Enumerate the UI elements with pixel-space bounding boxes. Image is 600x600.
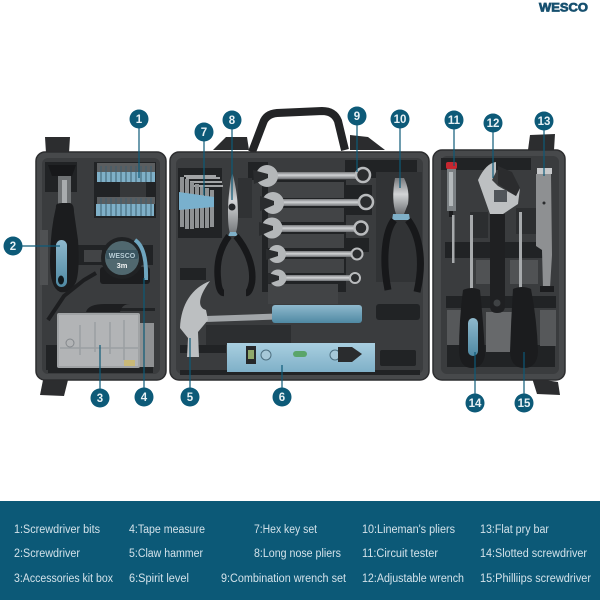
icon: hex key set: [179, 176, 223, 229]
callout 12: [484, 114, 502, 178]
legend column 5: [480, 524, 591, 585]
callout 5: [180, 338, 200, 406]
callout 6: [272, 365, 292, 406]
callout 4: 4: [141, 392, 148, 404]
panel: legend footer: [0, 501, 600, 600]
callout 7: [194, 122, 214, 195]
wrench 3: [259, 218, 368, 238]
callout 14: [466, 352, 484, 412]
panel: left case tray: [36, 152, 166, 380]
callout 13: [534, 112, 554, 176]
icon: slotted screwdriver: [459, 215, 485, 368]
legend column 4: 11:Circuit tester: [362, 548, 438, 560]
callout 14: 14: [469, 398, 482, 410]
callout 3: 3: [97, 393, 103, 405]
callout 9: [348, 106, 366, 172]
legend column 1: 3:Accessories kit box: [14, 573, 113, 585]
legend column 2: 6:Spirit level: [129, 573, 189, 585]
callout 1: 1: [136, 114, 143, 126]
legend column 1: 1:Screwdriver bits: [14, 524, 100, 536]
callout 11: 11: [448, 115, 461, 127]
icon: lineman's pliers: [385, 178, 420, 292]
legend column 1: [14, 524, 113, 585]
legend column 4: [362, 524, 464, 585]
icon: tape measure: [100, 237, 150, 284]
callout 10: [390, 110, 410, 188]
case carry handle: [213, 111, 385, 152]
callout 12: 12: [487, 118, 499, 130]
icon: spirit level: [227, 343, 375, 372]
callout 7: 7: [201, 127, 207, 139]
icon: accessories kit box: [57, 304, 140, 368]
legend column 3: 8:Long nose pliers: [254, 548, 341, 560]
icon: claw hammer: [180, 281, 362, 357]
callout 8: 8: [229, 115, 236, 127]
callout 11: [444, 110, 464, 166]
legend column 4: 12:Adjustable wrench: [362, 573, 464, 585]
callout 15: [514, 352, 534, 412]
icon: screwdriver: [48, 165, 96, 320]
callout 6: 6: [279, 392, 285, 404]
legend column 5: 15:Philliips screwdriver: [480, 573, 591, 585]
callout 2: 2: [10, 241, 16, 253]
legend column 5: 14:Slotted screwdriver: [480, 548, 587, 560]
callout 3: [90, 345, 110, 408]
case latches: [40, 134, 560, 396]
icon: circuit tester: [446, 162, 457, 263]
brand logo: WESCO: [539, 2, 588, 14]
legend column 4: 10:Lineman's pliers: [362, 524, 455, 536]
legend column 3: 7:Hex key set: [254, 524, 318, 536]
wrench 4: [266, 245, 362, 263]
callout 13: 13: [538, 116, 550, 128]
icon: tape measure: 3m: [117, 261, 128, 270]
wrench 1: [253, 165, 370, 187]
legend column 2: 5:Claw hammer: [129, 548, 203, 560]
callout 5: 5: [187, 392, 194, 404]
callout 9: 9: [354, 111, 360, 123]
panel: right case tray: [433, 150, 565, 380]
legend column 3: [221, 524, 347, 585]
callout 2: [4, 236, 60, 256]
callout 4: [134, 278, 154, 406]
callout 1: [130, 110, 148, 178]
panel: centre case tray: [170, 152, 429, 380]
callout 15: 15: [518, 398, 531, 410]
icon: adjustable wrench: [478, 162, 520, 313]
wrench 5: [268, 270, 360, 286]
wrench 2: [260, 192, 373, 214]
icon: phillips screwdriver: [510, 212, 538, 368]
legend column 2: [129, 524, 205, 585]
icon: tape measure: WESCO: [109, 253, 136, 260]
icon: combination wrench set: [253, 165, 373, 286]
legend column 3: 9:Combination wrench set: [221, 573, 347, 585]
callout markers: [4, 106, 554, 412]
icon: long nose pliers: [217, 172, 252, 293]
icon: flat pry bar: [536, 168, 554, 292]
legend column 2: 4:Tape measure: [129, 524, 205, 536]
callout 10: 10: [394, 114, 406, 126]
callout 8: [222, 110, 242, 200]
legend column 5: 13:Flat pry bar: [480, 524, 549, 536]
legend column 1: 2:Screwdriver: [14, 548, 80, 560]
icon: screwdriver bits: [96, 163, 155, 216]
